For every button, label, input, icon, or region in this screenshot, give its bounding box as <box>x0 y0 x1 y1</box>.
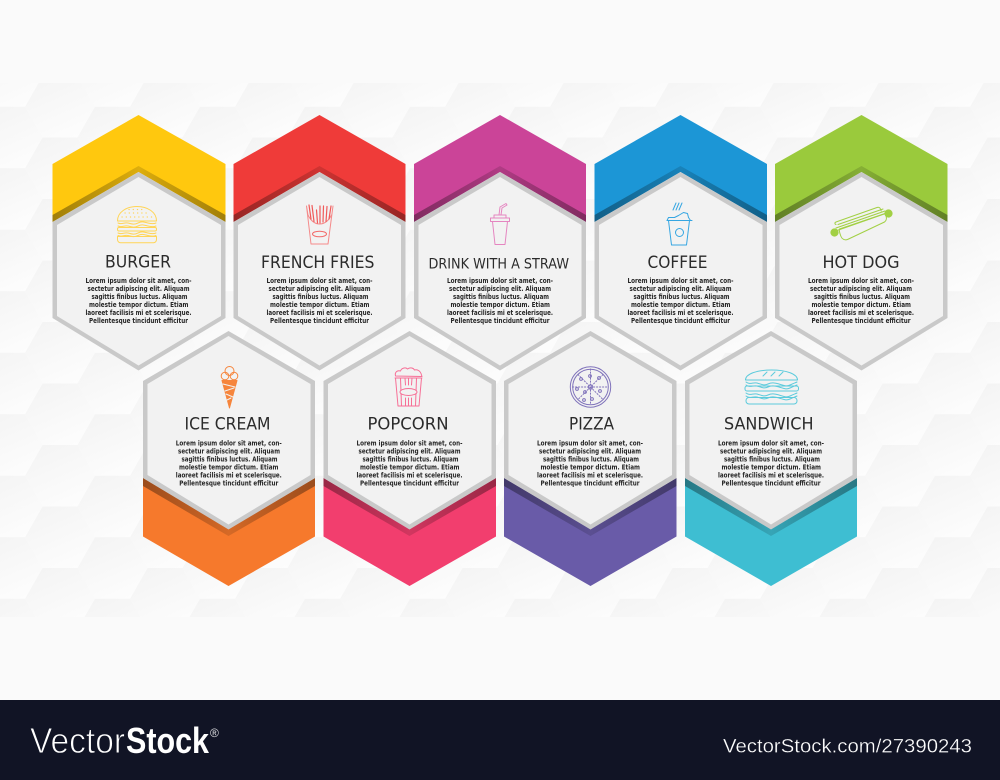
text block: sectetur adipiscing elit. Aliquam <box>630 284 732 293</box>
text block <box>356 438 463 488</box>
heading: DRINK WITH A STRAW <box>428 256 569 272</box>
text block <box>718 438 824 488</box>
text block <box>808 276 914 325</box>
text block: sagittis finibus luctus. Aliquam <box>182 454 278 464</box>
heading: FRENCH FRIES <box>261 253 374 272</box>
heading: BURGER <box>105 252 171 272</box>
icon: popcorn <box>395 368 422 406</box>
icon: burger <box>118 206 156 243</box>
text block: laoreet facilisis mi et scelerisque. <box>718 470 824 480</box>
text block: Pellentesque tincidunt efficitur <box>540 478 640 488</box>
icon: french fries <box>306 205 333 244</box>
text block: sectetur adipiscing elit. Aliquam <box>449 284 551 293</box>
icon: drink with straw <box>490 204 510 244</box>
heading: POPCORN <box>368 414 448 434</box>
text block: laoreet facilisis mi et scelerisque. <box>86 308 192 317</box>
panel: coffee <box>594 115 767 370</box>
icon: sandwich <box>745 370 798 404</box>
text block: molestie tempor dictum. Etiam <box>812 300 911 309</box>
text block: Pellentesque tincidunt efficitur <box>812 316 911 325</box>
text block: sagittis finibus luctus. Aliquam <box>724 454 820 464</box>
text block: sagittis finibus luctus. Aliquam <box>362 454 459 464</box>
text block: laoreet facilisis mi et scelerisque. <box>628 308 734 317</box>
text block: laoreet facilisis mi et scelerisque. <box>808 308 914 317</box>
text block: molestie tempor dictum. Etiam <box>450 300 550 309</box>
logo: VectorStock: ® <box>210 726 219 740</box>
text block <box>266 276 373 325</box>
text block: sagittis finibus luctus. Aliquam <box>272 292 369 301</box>
text block: Pellentesque tincidunt efficitur <box>179 478 279 488</box>
text block <box>537 438 643 488</box>
text block: molestie tempor dictum. Etiam <box>722 462 821 472</box>
text block: molestie tempor dictum. Etiam <box>89 300 189 309</box>
text block: laoreet facilisis mi et scelerisque. <box>537 470 643 480</box>
panel: pizza <box>504 331 676 586</box>
heading: PIZZA <box>569 414 615 434</box>
panel: drink with a straw <box>414 115 586 370</box>
text block: sagittis finibus luctus. Aliquam <box>814 292 910 301</box>
text block: sagittis finibus luctus. Aliquam <box>453 292 549 301</box>
heading: HOT DOG <box>822 253 900 272</box>
text block: laoreet facilisis mi et scelerisque. <box>447 308 553 317</box>
text block: sagittis finibus luctus. Aliquam <box>634 292 730 301</box>
text block: molestie tempor dictum. Etiam <box>540 462 640 472</box>
icon: hot dog <box>831 207 892 240</box>
text block: molestie tempor dictum. Etiam <box>179 462 279 472</box>
text block: sectetur adipiscing elit. Aliquam <box>268 284 371 293</box>
icon: ice cream cone <box>221 366 238 408</box>
text block <box>447 276 553 325</box>
text block: Pellentesque tincidunt efficitur <box>722 478 821 488</box>
text block <box>86 276 192 325</box>
text block: sagittis finibus luctus. Aliquam <box>543 454 639 464</box>
panel: sandwich <box>685 331 857 586</box>
text block <box>176 438 282 488</box>
text block: molestie tempor dictum. Etiam <box>270 300 370 309</box>
heading: ICE CREAM <box>184 414 270 434</box>
icon: coffee cup <box>667 203 692 245</box>
text block: laoreet facilisis mi et scelerisque. <box>356 470 463 480</box>
text block: Lorem ipsum dolor sit amet, con- <box>628 276 734 285</box>
image id: VectorStock.com/27390243 <box>723 736 972 758</box>
panel: french fries <box>234 115 406 370</box>
text block: Lorem ipsum dolor sit amet, con- <box>86 276 192 285</box>
text block: Pellentesque tincidunt efficitur <box>360 478 459 488</box>
text block: sectetur adipiscing elit. Aliquam <box>720 446 822 456</box>
logo: VectorStock: Vector <box>30 720 125 761</box>
logo: VectorStock <box>30 720 219 761</box>
panel: ice cream <box>143 331 315 586</box>
text block: Pellentesque tincidunt efficitur <box>89 316 188 325</box>
text block <box>628 276 734 325</box>
icon: pizza <box>570 367 611 407</box>
text block: sectetur adipiscing elit. Aliquam <box>539 446 641 456</box>
text block: Lorem ipsum dolor sit amet, con- <box>808 276 914 285</box>
text block: molestie tempor dictum. Etiam <box>631 300 731 309</box>
panel: burger <box>52 115 226 370</box>
text block: Lorem ipsum dolor sit amet, con- <box>447 276 553 285</box>
text block: Lorem ipsum dolor sit amet, con- <box>176 438 282 448</box>
text block: Lorem ipsum dolor sit amet, con- <box>356 438 462 448</box>
text block: sectetur adipiscing elit. Aliquam <box>358 446 461 456</box>
panel: hot dog <box>775 115 948 370</box>
text block: molestie tempor dictum. Etiam <box>360 462 460 472</box>
text block: Lorem ipsum dolor sit amet, con- <box>718 438 824 448</box>
heading: SANDWICH <box>724 414 814 434</box>
text block: sectetur adipiscing elit. Aliquam <box>178 446 280 456</box>
text block: Pellentesque tincidunt efficitur <box>450 316 550 325</box>
text block: Lorem ipsum dolor sit amet, con- <box>537 438 643 448</box>
panel: popcorn <box>324 331 496 586</box>
heading: COFFEE <box>648 253 708 272</box>
logo: VectorStock: Stock <box>126 720 210 761</box>
text block: sectetur adipiscing elit. Aliquam <box>810 284 912 293</box>
text block: sectetur adipiscing elit. Aliquam <box>88 284 190 293</box>
text block: Pellentesque tincidunt efficitur <box>270 316 369 325</box>
text block: sagittis finibus luctus. Aliquam <box>92 292 188 301</box>
text block: Pellentesque tincidunt efficitur <box>631 316 730 325</box>
footer bar <box>0 700 1000 780</box>
text block: laoreet facilisis mi et scelerisque. <box>266 308 373 317</box>
text block: laoreet facilisis mi et scelerisque. <box>176 470 282 480</box>
text block: Lorem ipsum dolor sit amet, con- <box>266 276 372 285</box>
